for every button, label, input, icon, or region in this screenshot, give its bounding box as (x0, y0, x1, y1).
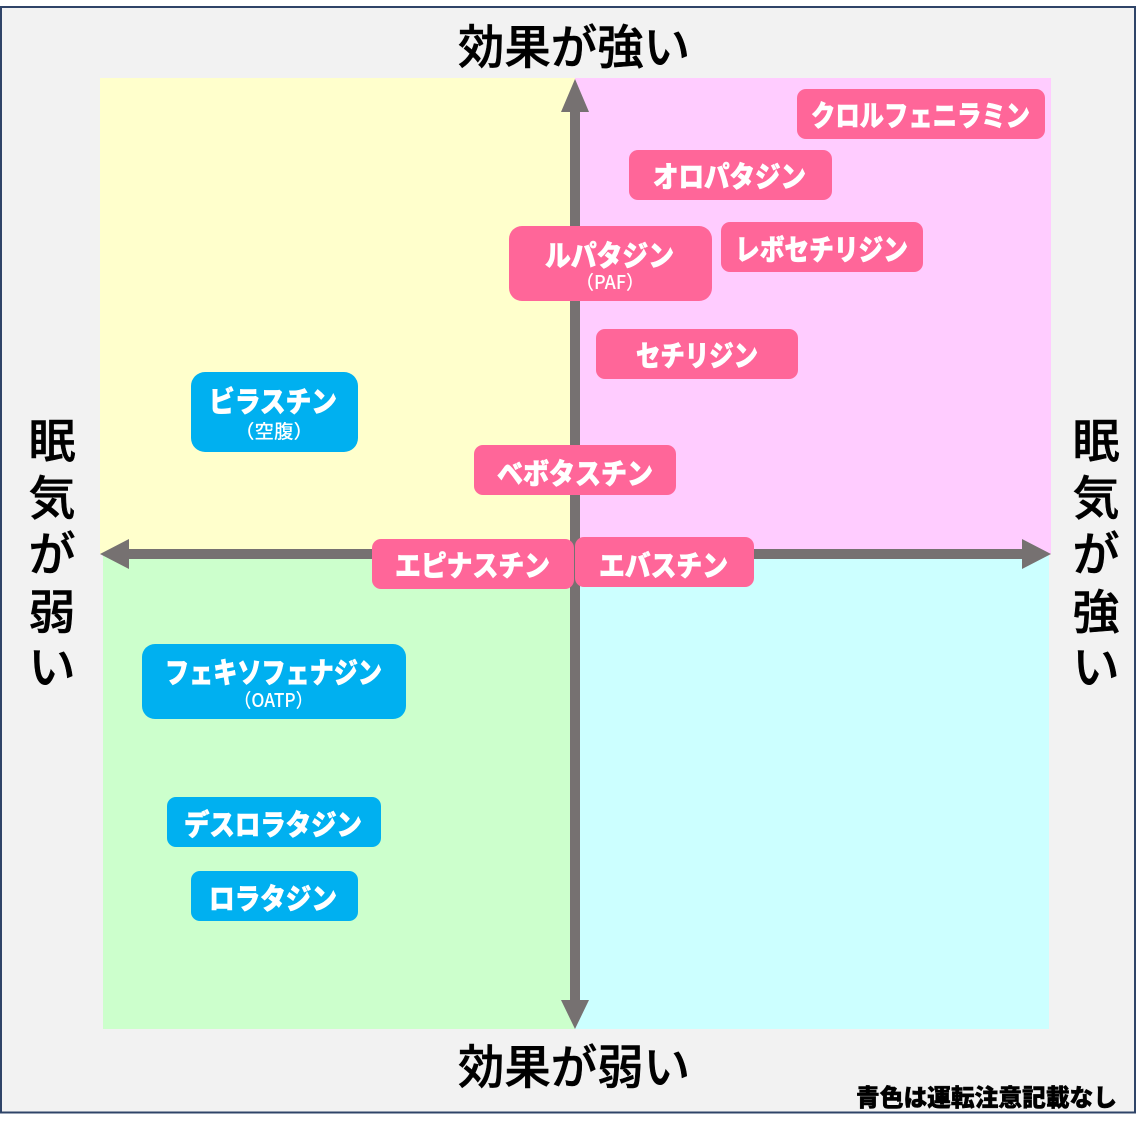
heading: strong drowsiness: い (1072, 641, 1120, 694)
arrow: vertical axis (561, 79, 589, 1029)
pill: epinastine (372, 539, 574, 589)
pill: cetirizine (596, 329, 798, 379)
pill: desloratadine (167, 797, 381, 847)
quadrant: weak drowsiness, strong effect (100, 78, 575, 554)
pill: levocetirizine: レボセチリジン (735, 234, 908, 267)
heading: weak drowsiness: 気 (28, 472, 76, 525)
pill: rupatadine (509, 226, 712, 301)
quadrant: weak drowsiness, weak effect (103, 554, 575, 1029)
heading: strong drowsiness: 眠 (1072, 415, 1120, 468)
pill: fexofenadine: （OATP） (234, 686, 313, 713)
heading: weak drowsiness: い (28, 641, 76, 694)
pill: desloratadine: デスロラタジン (184, 808, 362, 842)
pill: olopatadine (629, 150, 832, 200)
heading: strong drowsiness: 強 (1072, 586, 1120, 639)
pill: ebastine: エバスチン (599, 551, 728, 583)
pill: chlorpheniramine (797, 89, 1045, 139)
heading: weak effect: 効果が弱い (458, 1041, 690, 1094)
pill: rupatadine: （PAF） (576, 268, 644, 295)
heading: weak drowsiness: 眠 (28, 415, 76, 468)
footnote: 青色は運転注意記載なし (856, 1085, 1117, 1112)
pill: bilastine (191, 372, 358, 452)
heading: strong drowsiness: が (1072, 528, 1120, 581)
pill: olopatadine: オロパタジン (653, 161, 806, 194)
heading: strong effect: 効果が強い (458, 21, 690, 74)
heading: weak drowsiness: 弱 (28, 586, 76, 639)
heading: strong drowsiness: 気 (1072, 472, 1120, 525)
pill: levocetirizine (721, 222, 923, 272)
pill: cetirizine: セチリジン (636, 341, 758, 373)
pill: loratadine (191, 871, 358, 921)
pill: loratadine: ロラタジン (209, 883, 337, 916)
pill: ebastine (575, 537, 754, 587)
pill: chlorpheniramine: クロルフェニラミン (811, 100, 1030, 133)
pill: bepotastine: ベボタスチン (497, 458, 653, 491)
pill: epinastine: エピナスチン (395, 550, 550, 583)
pill: fexofenadine: フェキソフェナジン (165, 658, 382, 690)
pill: bilastine: （空腹） (235, 417, 313, 444)
pill: bilastine: ビラスチン (209, 385, 337, 419)
heading: weak drowsiness: が (28, 528, 76, 581)
pill: bepotastine (474, 445, 676, 495)
pill: rupatadine: ルパタジン (545, 240, 674, 273)
quadrant: strong drowsiness, weak effect (575, 554, 1049, 1029)
pill: fexofenadine (142, 644, 406, 719)
arrow: horizontal axis (100, 539, 1051, 569)
quadrant: strong drowsiness, strong effect (575, 78, 1051, 554)
